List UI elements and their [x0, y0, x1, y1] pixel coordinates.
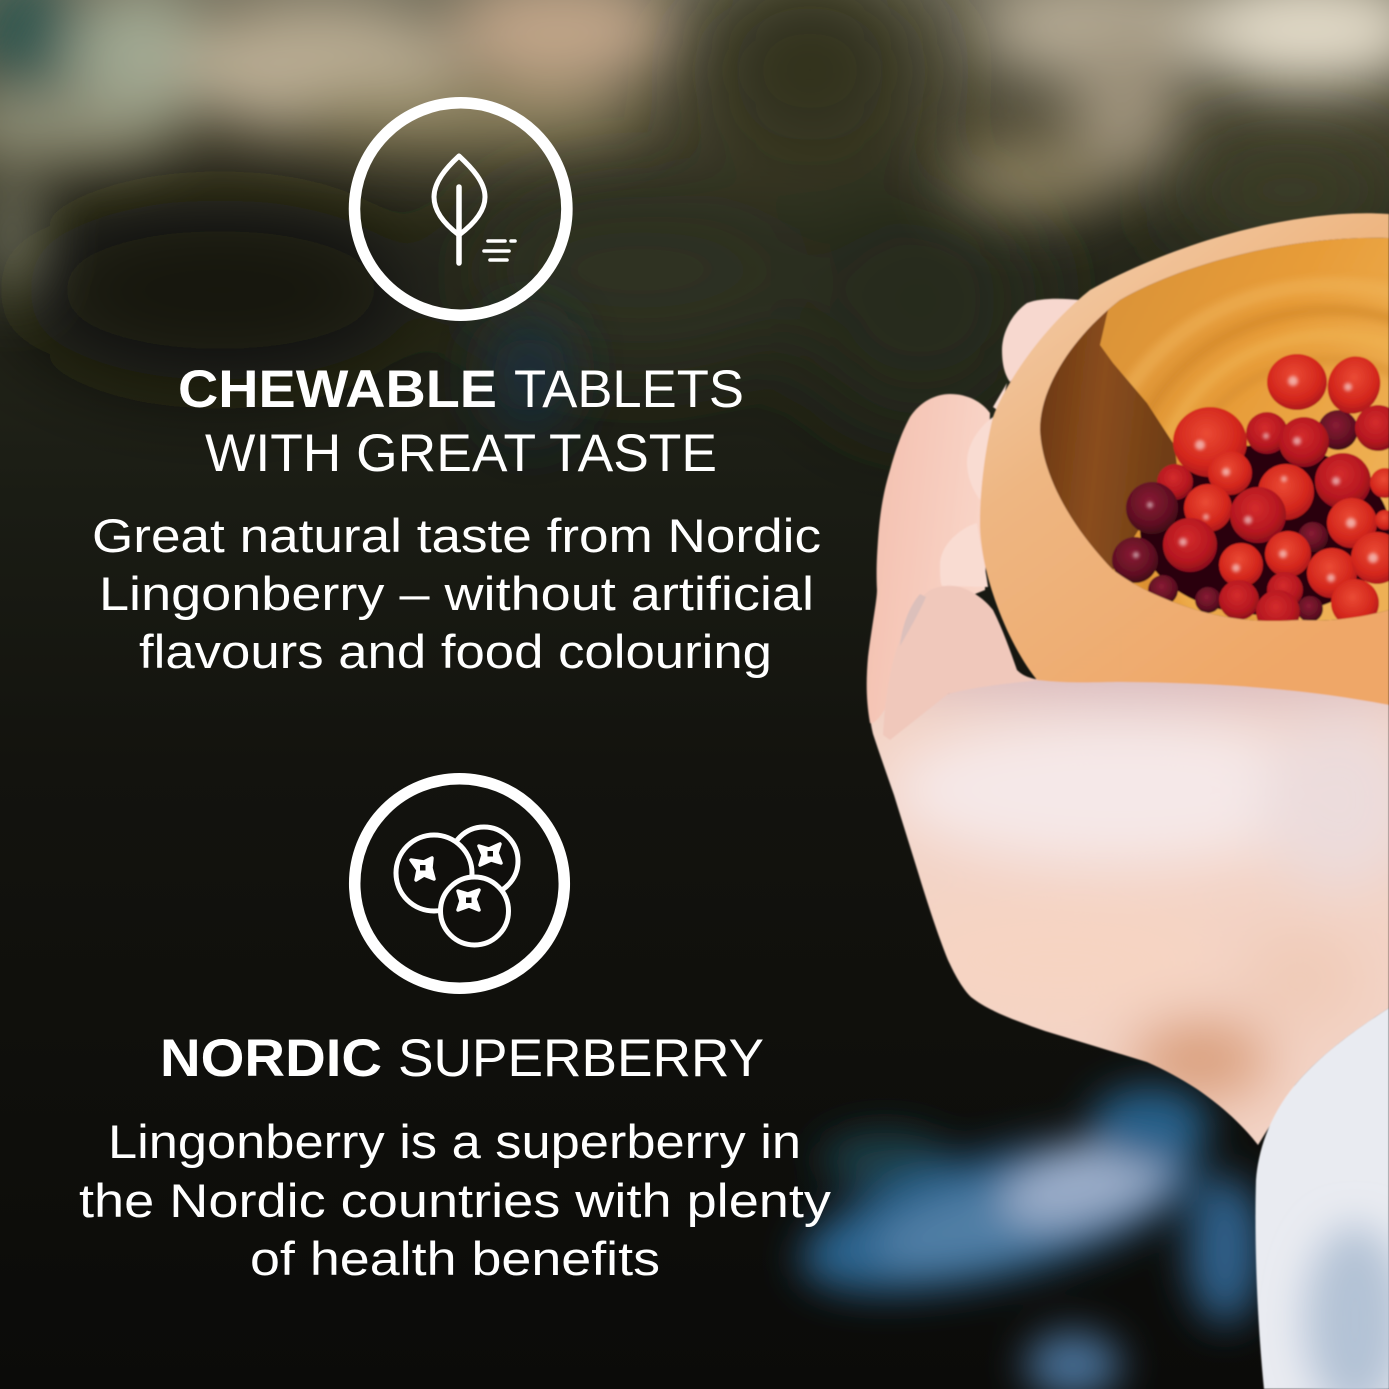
back berry	[450, 827, 518, 895]
left berry	[396, 835, 472, 911]
bowl rim	[980, 213, 1389, 705]
star centres	[420, 851, 493, 903]
thumb	[883, 586, 1040, 740]
lower hand	[870, 678, 1389, 1146]
heading: chewable tablets: WITH GREAT TASTE	[205, 424, 717, 483]
text block: lingonberry superberry: the Nordic countries with plenty	[79, 1174, 832, 1227]
text block: great natural taste: Lingonberry – without artificial	[99, 567, 814, 620]
photo: hands holding wooden bowl of lingonberries	[860, 213, 1389, 1389]
front berry	[440, 877, 508, 945]
text block: lingonberry superberry	[79, 1115, 832, 1285]
text block: lingonberry superberry: of health benefits	[250, 1232, 660, 1285]
bowl shadow	[1040, 310, 1177, 570]
taste lines	[484, 241, 515, 260]
heading: nordic superberry	[160, 1029, 764, 1088]
heading: chewable tablets: CHEWABLE	[178, 360, 497, 419]
heading: nordic superberry: NORDIC	[160, 1029, 382, 1088]
ring	[355, 779, 564, 988]
wooden bowl inner	[1040, 238, 1389, 621]
text block: great natural taste	[92, 509, 821, 678]
ring	[354, 103, 567, 315]
upper fingers	[867, 394, 990, 723]
text block: great natural taste: flavours and food colouring	[139, 625, 772, 678]
berry stars	[411, 844, 501, 910]
top finger	[1002, 299, 1090, 382]
leaf stem	[456, 187, 462, 263]
icon: berries in ring	[355, 779, 564, 988]
bowl wood rings	[1126, 277, 1389, 620]
icon: leaf in ring	[354, 103, 567, 315]
heading: chewable tablets: TABLETS	[514, 360, 744, 419]
berries	[1112, 349, 1389, 634]
text block: lingonberry superberry: Lingonberry is a superberry in	[108, 1115, 801, 1168]
sleeve	[1255, 1008, 1389, 1389]
text block: great natural taste: Great natural taste from Nordic	[92, 509, 821, 562]
heading: chewable tablets	[178, 360, 744, 483]
leaf outline	[434, 156, 485, 235]
middle finger tips	[940, 383, 1007, 587]
heading: nordic superberry: SUPERBERRY	[398, 1029, 764, 1088]
thumb nail	[900, 594, 926, 646]
